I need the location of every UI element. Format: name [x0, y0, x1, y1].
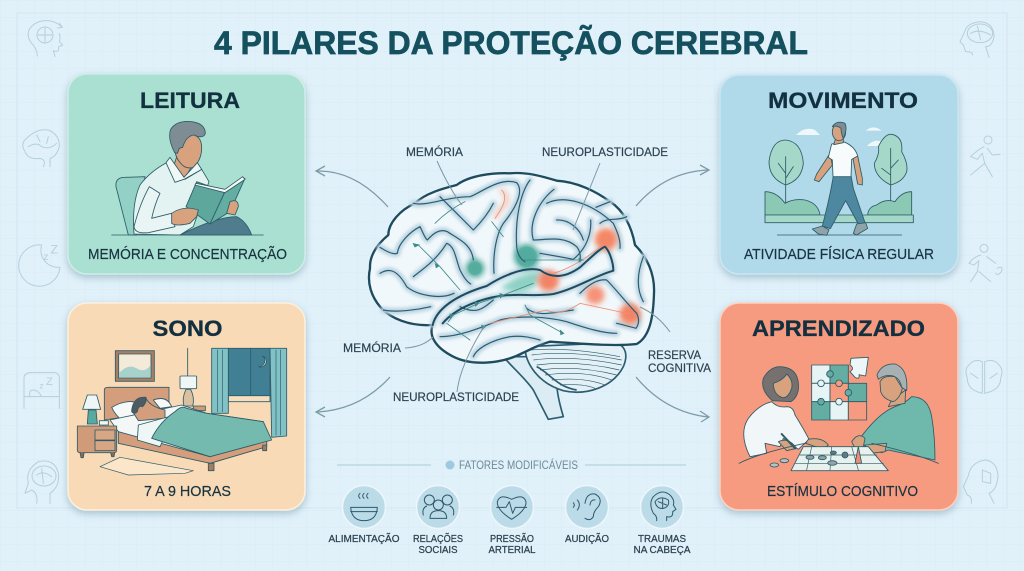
heading: Aprendizado: APRENDIZADO [752, 316, 925, 341]
illustration: man walking in park [765, 122, 913, 235]
caption: Leitura: MEMÓRIA E CONCENTRAÇÃO [88, 246, 287, 263]
caption: Sono: 7 A 9 HORAS [144, 483, 231, 500]
illustration: person sleeping in bedroom [77, 348, 287, 475]
section heading [337, 459, 686, 472]
leader lines [405, 161, 670, 392]
factor: traumas na cabeça [634, 486, 690, 556]
icon: walking person [971, 136, 1000, 177]
panel: Sono [68, 303, 305, 510]
factor: traumas na cabeça: TRAUMAS [638, 533, 686, 545]
section: fatores modificáveis [328, 459, 690, 556]
neural pathways [414, 190, 630, 340]
icon: bed: z [39, 380, 44, 390]
factor: traumas na cabeça: NA CABEÇA [634, 544, 690, 556]
label: reserva cognitiva: RESERVA [648, 348, 701, 362]
icon: head with brain, left [25, 461, 59, 503]
factor: relações sociais [413, 486, 463, 556]
cerebellum [525, 343, 626, 392]
icon: head with brain, lower right [963, 460, 998, 503]
illustration: man reading [112, 121, 263, 235]
icon: moon and z: Z [51, 242, 58, 256]
glow: coral activation [495, 190, 641, 325]
label: memória top: MEMÓRIA [406, 144, 463, 159]
caption: Movimento: ATIVIDADE FÍSICA REGULAR [744, 246, 934, 263]
heading: Movimento: MOVIMENTO [768, 88, 918, 113]
factor: pressão arterial: PRESSÃO [490, 532, 534, 545]
arrow: brain to Movimento [636, 165, 709, 206]
factor: alimentação: ALIMENTAÇÃO [328, 532, 400, 545]
factor: pressão arterial [488, 486, 536, 556]
icon: bowl [351, 493, 377, 521]
section heading: FATORES MODIFICÁVEIS [459, 459, 578, 472]
heading: Sono: SONO [152, 316, 222, 341]
brain shading [380, 180, 643, 357]
gyri lines [380, 180, 643, 357]
factor: pressão arterial: ARTERIAL [488, 544, 536, 556]
icon: head with circular arrow [28, 21, 63, 57]
factor: relações sociais: SOCIAIS [418, 544, 458, 556]
label: neuroplasticidade bottom: NEUROPLASTICIDADE [393, 390, 519, 404]
decorative icons: left column [19, 21, 63, 503]
arrow: brain to Aprendizado [636, 377, 709, 422]
factor: audição: AUDIÇÃO [565, 532, 609, 545]
caption: Aprendizado: ESTÍMULO COGNITIVO [767, 483, 918, 500]
icon: bed: Z [46, 376, 53, 388]
icon: moon and z: z [43, 252, 48, 263]
icon: bed [24, 373, 59, 408]
factor: relações sociais: RELAÇÕES [413, 532, 463, 545]
icon: moon and z [19, 242, 60, 286]
panel: Leitura [68, 74, 305, 274]
glow: teal activation [466, 244, 540, 293]
brainstem [503, 357, 563, 419]
decorative icons: right column [960, 22, 1002, 503]
illustration: couple solving puzzle and board game [739, 357, 938, 471]
title: 4 PILARES DA PROTEÇÃO CEREBRAL [214, 25, 808, 61]
icon: head with brain, right [960, 22, 994, 57]
icon: people [423, 495, 454, 518]
label: memória bottom: MEMÓRIA [343, 340, 401, 355]
icon: walking person with leaves [969, 244, 1002, 282]
panel: Movimento [720, 75, 958, 274]
panel: Aprendizado [720, 303, 958, 510]
arrow: brain to Sono [316, 377, 390, 417]
label: reserva cognitiva: COGNITIVA [648, 361, 711, 375]
icon: brain [23, 130, 59, 167]
factor: audição [565, 486, 609, 545]
cerebrum [369, 173, 654, 363]
brain illustration [369, 173, 654, 419]
icon: head with brain [651, 492, 676, 521]
factor: alimentação [328, 486, 400, 545]
arrow: brain to Leitura [316, 166, 388, 207]
heading: Leitura: LEITURA [140, 88, 240, 113]
icon: ear [573, 494, 600, 520]
label: neuroplasticidade top: NEUROPLASTICIDADE [542, 145, 668, 159]
icon: two lobed brain [966, 361, 1002, 393]
icon: heart with pulse [497, 497, 527, 519]
